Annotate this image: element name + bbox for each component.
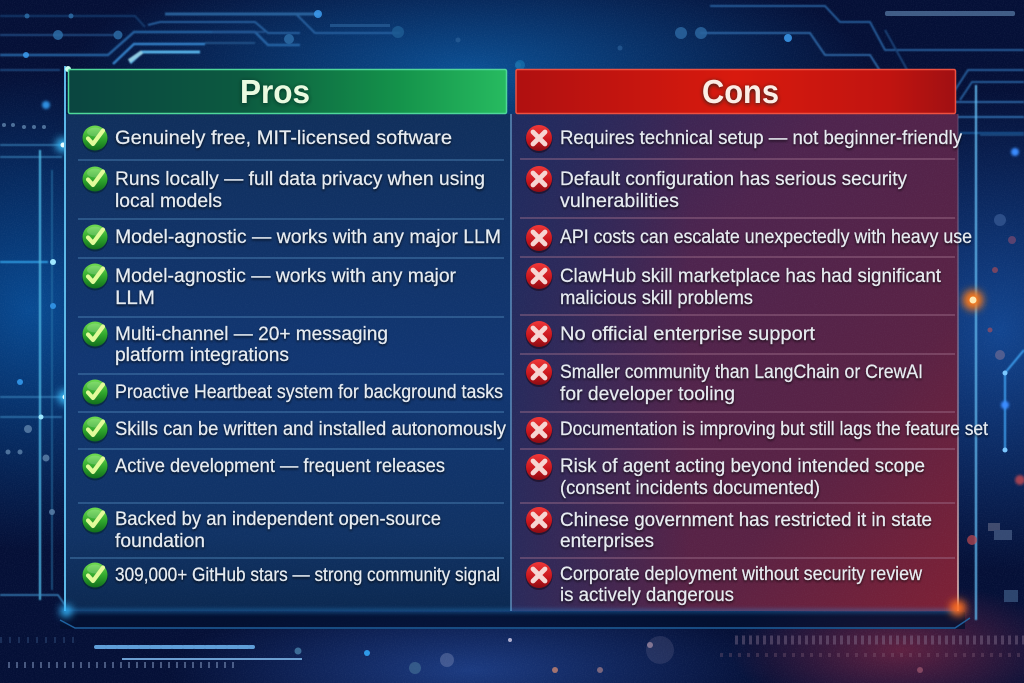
con 2: vulnerabilities <box>560 191 679 212</box>
left column background <box>66 114 511 611</box>
con 10: Corporate deployment without security review <box>560 564 922 585</box>
con 8: Risk of agent acting beyond intended scope <box>560 456 925 477</box>
con 3 <box>526 225 972 253</box>
pro 6 <box>82 380 503 406</box>
right specks <box>967 214 1024 602</box>
con 6 <box>526 359 923 405</box>
con 9 <box>526 507 932 552</box>
con 8 <box>526 454 925 499</box>
circuit nodes: top left <box>23 10 404 58</box>
con 9: Chinese government has restricted it in state <box>560 510 932 531</box>
pro 5: Multi-channel — 20+ messaging <box>115 324 388 345</box>
pro 1: Genuinely free, MIT-licensed software <box>115 128 452 149</box>
panel frame <box>60 66 966 617</box>
pro 2: Runs locally — full data privacy when using <box>115 169 485 190</box>
heading: Cons: Cons <box>702 73 779 110</box>
pros list <box>82 126 506 590</box>
con 2 <box>526 166 907 212</box>
cons list <box>526 125 989 606</box>
pro 1 <box>82 126 452 152</box>
pro 9: foundation <box>115 531 205 552</box>
con 7: Documentation is improving but still lags the feature set <box>560 419 989 440</box>
con 4 <box>526 263 942 309</box>
separators <box>70 159 955 558</box>
circuit nodes: top right <box>650 27 792 80</box>
con 2: Default configuration has serious security <box>560 169 907 190</box>
con 4: malicious skill problems <box>560 288 753 309</box>
pro 7: Skills can be written and installed autonomously <box>115 419 506 440</box>
pro 4: LLM <box>115 288 155 309</box>
con 3: API costs can escalate unexpectedly with heavy use <box>560 227 972 248</box>
pro 4 <box>82 264 457 309</box>
pro 9 <box>82 508 441 552</box>
left glow nodes <box>17 101 72 420</box>
con 6: Smaller community than LangChain or CrewAI <box>560 362 923 383</box>
panel <box>60 66 966 617</box>
con 9: enterprises <box>560 531 654 552</box>
pro 4: Model-agnostic — works with any major <box>115 266 457 287</box>
right glow nodes <box>963 148 1019 452</box>
heading: Pros <box>68 70 506 114</box>
con 5 <box>526 321 816 349</box>
pro 5 <box>82 322 388 366</box>
right outer frame lines <box>976 85 1024 620</box>
con 10 <box>526 562 922 606</box>
circuit lines: top left <box>0 14 400 70</box>
con 7 <box>526 417 989 445</box>
con 5: No official enterprise support <box>560 324 816 345</box>
pro 8 <box>82 454 445 480</box>
pro 8: Active development — frequent releases <box>115 456 445 477</box>
pro 9: Backed by an independent open-source <box>115 509 441 530</box>
pro 2 <box>82 166 485 212</box>
pro 10: 309,000+ GitHub stars — strong community signal <box>115 565 500 586</box>
bottom decorations <box>0 612 1024 674</box>
con 6: for developer tooling <box>560 384 735 405</box>
con 10: is actively dangerous <box>560 585 734 606</box>
pro 10 <box>82 562 500 590</box>
heading: Cons <box>516 70 956 114</box>
pro 2: local models <box>115 191 222 212</box>
pro 6: Proactive Heartbeat system for background tasks <box>115 382 503 403</box>
data dots: top <box>330 11 1015 70</box>
pro 3: Model-agnostic — works with any major LLM <box>115 227 501 248</box>
circuit lines: top right <box>675 6 1024 133</box>
con 1 <box>526 125 962 153</box>
con 1: Requires technical setup — not beginner-friendly <box>560 128 962 149</box>
left outer frame lines <box>0 145 65 605</box>
con 4: ClawHub skill marketplace has had significant <box>560 266 942 287</box>
left data dots <box>2 123 55 515</box>
pro 5: platform integrations <box>115 345 289 366</box>
con 8: (consent incidents documented) <box>560 478 820 499</box>
right column background <box>511 114 958 611</box>
heading: Pros: Pros <box>240 73 310 110</box>
